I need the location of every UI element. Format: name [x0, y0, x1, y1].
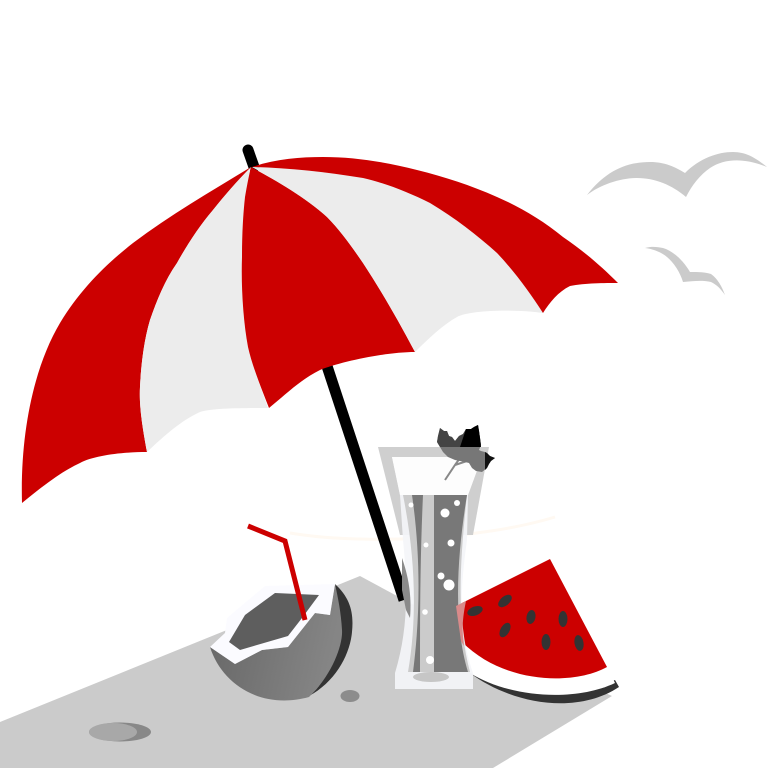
melon through glass tint: [456, 601, 466, 646]
coconut body: [210, 584, 342, 700]
pebble shadow: [89, 722, 151, 742]
pebble small: [340, 690, 360, 702]
watermelon slice: [456, 559, 619, 703]
coconut opening: [229, 593, 319, 650]
pebble top: [89, 723, 137, 741]
coconut: [210, 526, 352, 700]
glass of soda: [378, 425, 495, 689]
glass inner pale: [403, 495, 470, 672]
glass bottom shadow: [413, 672, 449, 682]
melon rind dark: [468, 665, 619, 703]
umbrella: [22, 150, 618, 503]
drink left strip: [412, 495, 423, 672]
melon seeds: [466, 592, 585, 652]
straw: [248, 526, 305, 620]
mint leaves: [437, 425, 495, 472]
leaf body lower: [437, 425, 495, 472]
drink right strip: [434, 495, 468, 672]
bubbles: [408, 500, 460, 664]
sand ground: [0, 576, 612, 768]
canopy panel: center red: [242, 167, 415, 408]
pole seen through glass: [402, 558, 411, 618]
leaf tip: [485, 452, 495, 470]
glass white body: [392, 457, 482, 689]
stem of mint: [445, 458, 470, 480]
melon flesh: [456, 559, 607, 678]
leaf upper right: [460, 425, 481, 447]
icon: seagull small: [645, 247, 725, 295]
pebble large: [89, 722, 151, 742]
canopy panel: right white: [252, 167, 543, 352]
umbrella pole: [325, 360, 404, 600]
leaf upper left: [437, 425, 481, 447]
icon: seagull large: [587, 152, 767, 197]
umbrella tip: [248, 150, 254, 167]
coconut shell dark side: [309, 584, 352, 696]
faint shadow arc: [290, 517, 555, 539]
coconut white rim: [210, 584, 335, 664]
canopy panel: left white: [140, 167, 268, 452]
glass top highlight: [392, 457, 482, 495]
canopy panel: far right red: [252, 157, 618, 313]
melon rind white: [462, 640, 615, 695]
glass frame: [378, 447, 489, 535]
canopy panel: far left red: [22, 167, 251, 503]
